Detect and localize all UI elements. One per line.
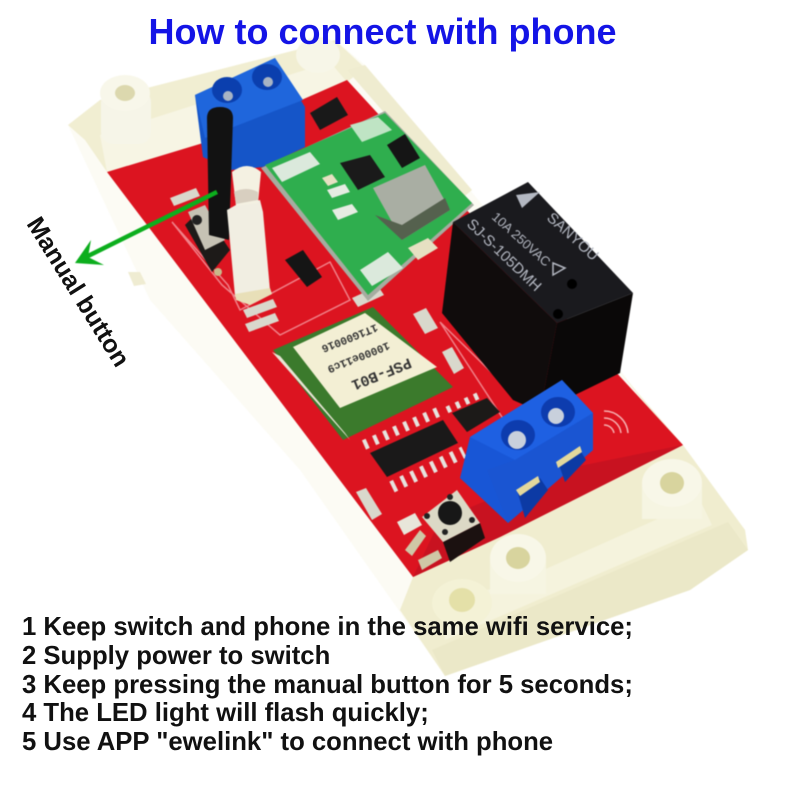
mounting post: top right bbox=[296, 37, 340, 73]
relay label: SJ-S-105DMH bbox=[463, 216, 545, 295]
module markings: PSF-B01 bbox=[349, 353, 413, 393]
LED light pipe bbox=[227, 166, 272, 305]
mounting post: top left bbox=[100, 75, 151, 144]
module markings bbox=[319, 320, 413, 393]
module markings: 10000e11c9 bbox=[325, 338, 391, 374]
label: manual button: Manual button bbox=[21, 212, 135, 372]
tactile button bbox=[397, 490, 485, 570]
IC chips bbox=[364, 394, 500, 487]
blue terminal block: top bbox=[195, 58, 305, 170]
instruction steps: 4 The LED light will flash quickly; bbox=[22, 699, 429, 727]
relay label: 10A 250VAC bbox=[489, 209, 554, 269]
blue terminal block: bottom bbox=[460, 380, 593, 523]
instruction steps: 5 Use APP "ewelink" to connect with phone bbox=[22, 728, 553, 756]
instruction steps: 2 Supply power to switch bbox=[22, 642, 330, 670]
instruction steps: 1 Keep switch and phone in the same wifi service; bbox=[22, 613, 633, 641]
green arrow pointing to manual button bbox=[75, 192, 217, 265]
cream enclosure bbox=[68, 37, 748, 676]
mounting post: bottom middle bbox=[490, 534, 546, 594]
title: How to connect with phone bbox=[149, 11, 616, 52]
green power module bbox=[261, 111, 474, 301]
wifi module bbox=[272, 307, 453, 440]
mounting post: bottom right bbox=[642, 459, 702, 519]
black relay bbox=[442, 182, 633, 412]
red circuit board bbox=[107, 80, 683, 577]
relay label: SANYOU bbox=[543, 209, 602, 264]
relay label bbox=[463, 192, 602, 319]
black manual button stem bbox=[207, 107, 233, 240]
module markings: 1T1G00016 bbox=[319, 320, 379, 354]
manual button base bbox=[185, 205, 230, 276]
instruction steps: 3 Keep pressing the manual button for 5 seconds; bbox=[22, 671, 633, 699]
instruction steps bbox=[22, 613, 633, 756]
wifi logo on board bbox=[604, 411, 628, 433]
small chip near top terminal bbox=[310, 97, 348, 130]
small chip on red board bbox=[285, 250, 322, 287]
small resistors bbox=[170, 188, 464, 520]
mounting post: bottom left bbox=[432, 579, 492, 627]
